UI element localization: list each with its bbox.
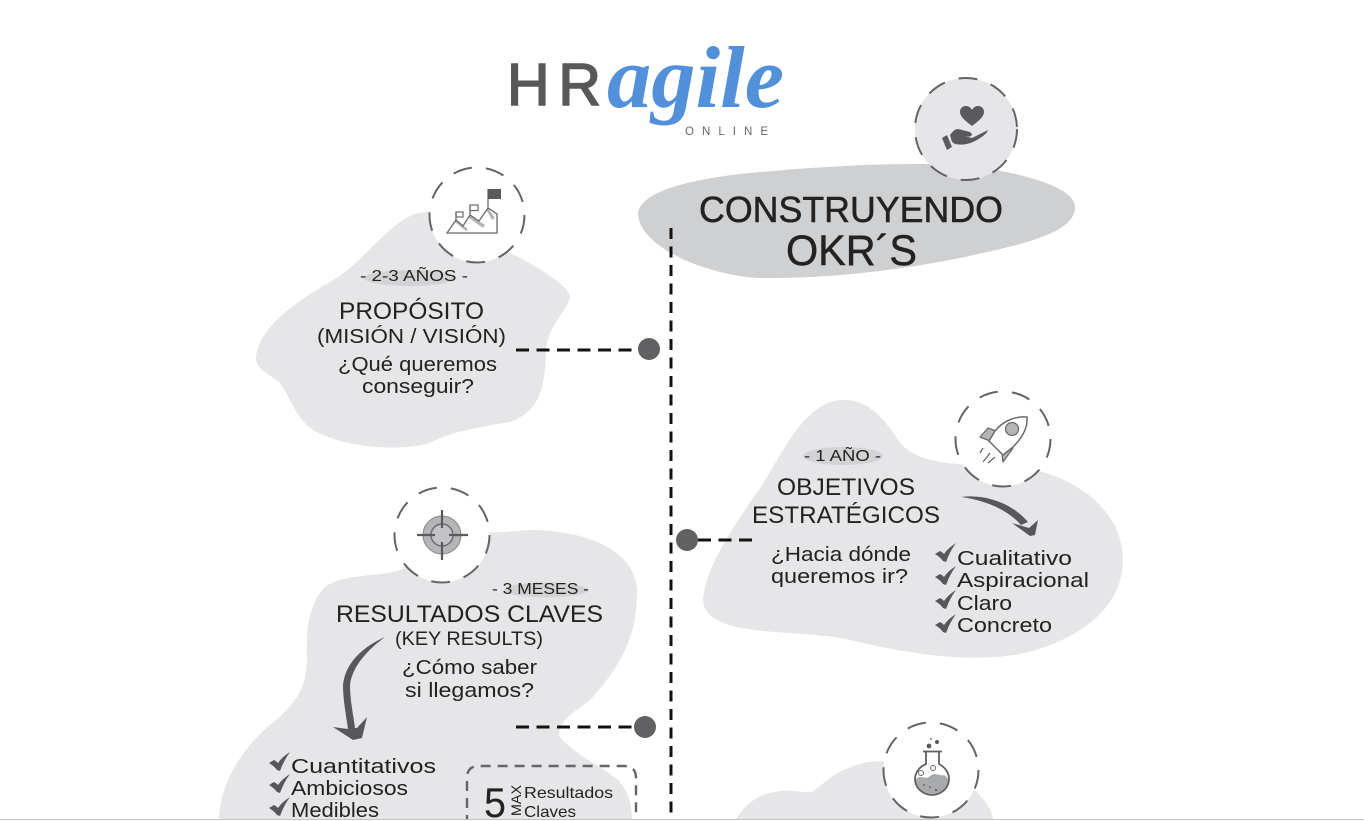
propósito text <box>317 265 506 398</box>
callout: máximo 5 resultados claves: Claves <box>524 804 576 821</box>
resultados text: RESULTADOS CLAVES <box>336 601 603 628</box>
resultados text: ¿Cómo saber <box>402 657 537 679</box>
callout: máximo 5 resultados claves: Resultados <box>524 785 613 802</box>
propósito blob <box>256 212 570 448</box>
panel: title <box>638 78 1075 278</box>
logo: HR agile online: HR <box>507 52 601 118</box>
checklist: objetivos: Aspiracional <box>957 570 1089 592</box>
title text <box>699 189 1003 275</box>
objetivos text: OBJETIVOS <box>777 474 915 501</box>
connector: propósito <box>516 338 660 360</box>
resultados text: si llegamos? <box>405 680 534 702</box>
resultados text: - 3 MESES - <box>492 581 589 598</box>
resultados text: (KEY RESULTS) <box>395 629 543 650</box>
title blob <box>638 164 1075 278</box>
timeline: vertical dashed spine <box>670 228 672 816</box>
checklist: objetivos: Concreto <box>957 615 1052 637</box>
objetivos text <box>752 445 940 588</box>
objetivos text: ESTRATÉGICOS <box>752 502 940 529</box>
arrow: objetivos <box>961 496 1038 536</box>
propósito text: PROPÓSITO <box>339 298 484 325</box>
propósito text: conseguir? <box>362 376 474 398</box>
callout: máximo 5 resultados claves: MAX <box>508 784 524 816</box>
arrow: resultados <box>333 637 385 740</box>
panel: objetivos estratégicos <box>703 392 1123 658</box>
callout: máximo 5 resultados claves <box>467 766 636 821</box>
connector: objetivos <box>676 529 756 551</box>
checklist: resultados: Cuantitativos <box>291 756 436 778</box>
checklist: objetivos: Cualitativo <box>957 548 1072 570</box>
icon: hand holding heart <box>915 78 1017 180</box>
resultados blob <box>219 530 637 819</box>
propósito text: (MISIÓN / VISIÓN) <box>317 325 506 348</box>
objetivos text: - 1 AÑO - <box>804 445 881 465</box>
panel: propósito <box>256 168 570 448</box>
icon: target <box>394 488 490 582</box>
icon: rocket <box>956 392 1050 486</box>
connector: resultados <box>516 716 656 738</box>
panel: resultados claves <box>219 488 637 821</box>
checklist: objetivos: Claro <box>957 593 1012 615</box>
propósito text: ¿Qué queremos <box>338 354 497 376</box>
objetivos text: ¿Hacia dónde <box>771 544 911 566</box>
logo: HR agile online: ONLINE <box>685 126 768 138</box>
experimentos blob <box>736 761 993 819</box>
logo: HR agile online: agile <box>607 30 784 127</box>
checklist: resultados: Ambiciosos <box>291 778 408 800</box>
title text: OKR´S <box>786 227 917 275</box>
objetivos text: queremos ir? <box>771 566 908 588</box>
propósito text: - 2-3 AÑOS - <box>360 265 468 285</box>
checklist: objetivos <box>935 543 1089 637</box>
resultados text <box>336 581 603 702</box>
objetivos blob <box>703 400 1123 658</box>
title text: CONSTRUYENDO <box>699 189 1003 230</box>
icon: mountain flags <box>430 168 524 262</box>
icon: flask <box>884 722 978 818</box>
checklist: resultados <box>269 752 436 821</box>
logo: HR agile online <box>507 30 784 138</box>
panel: experimentos <box>736 722 993 819</box>
